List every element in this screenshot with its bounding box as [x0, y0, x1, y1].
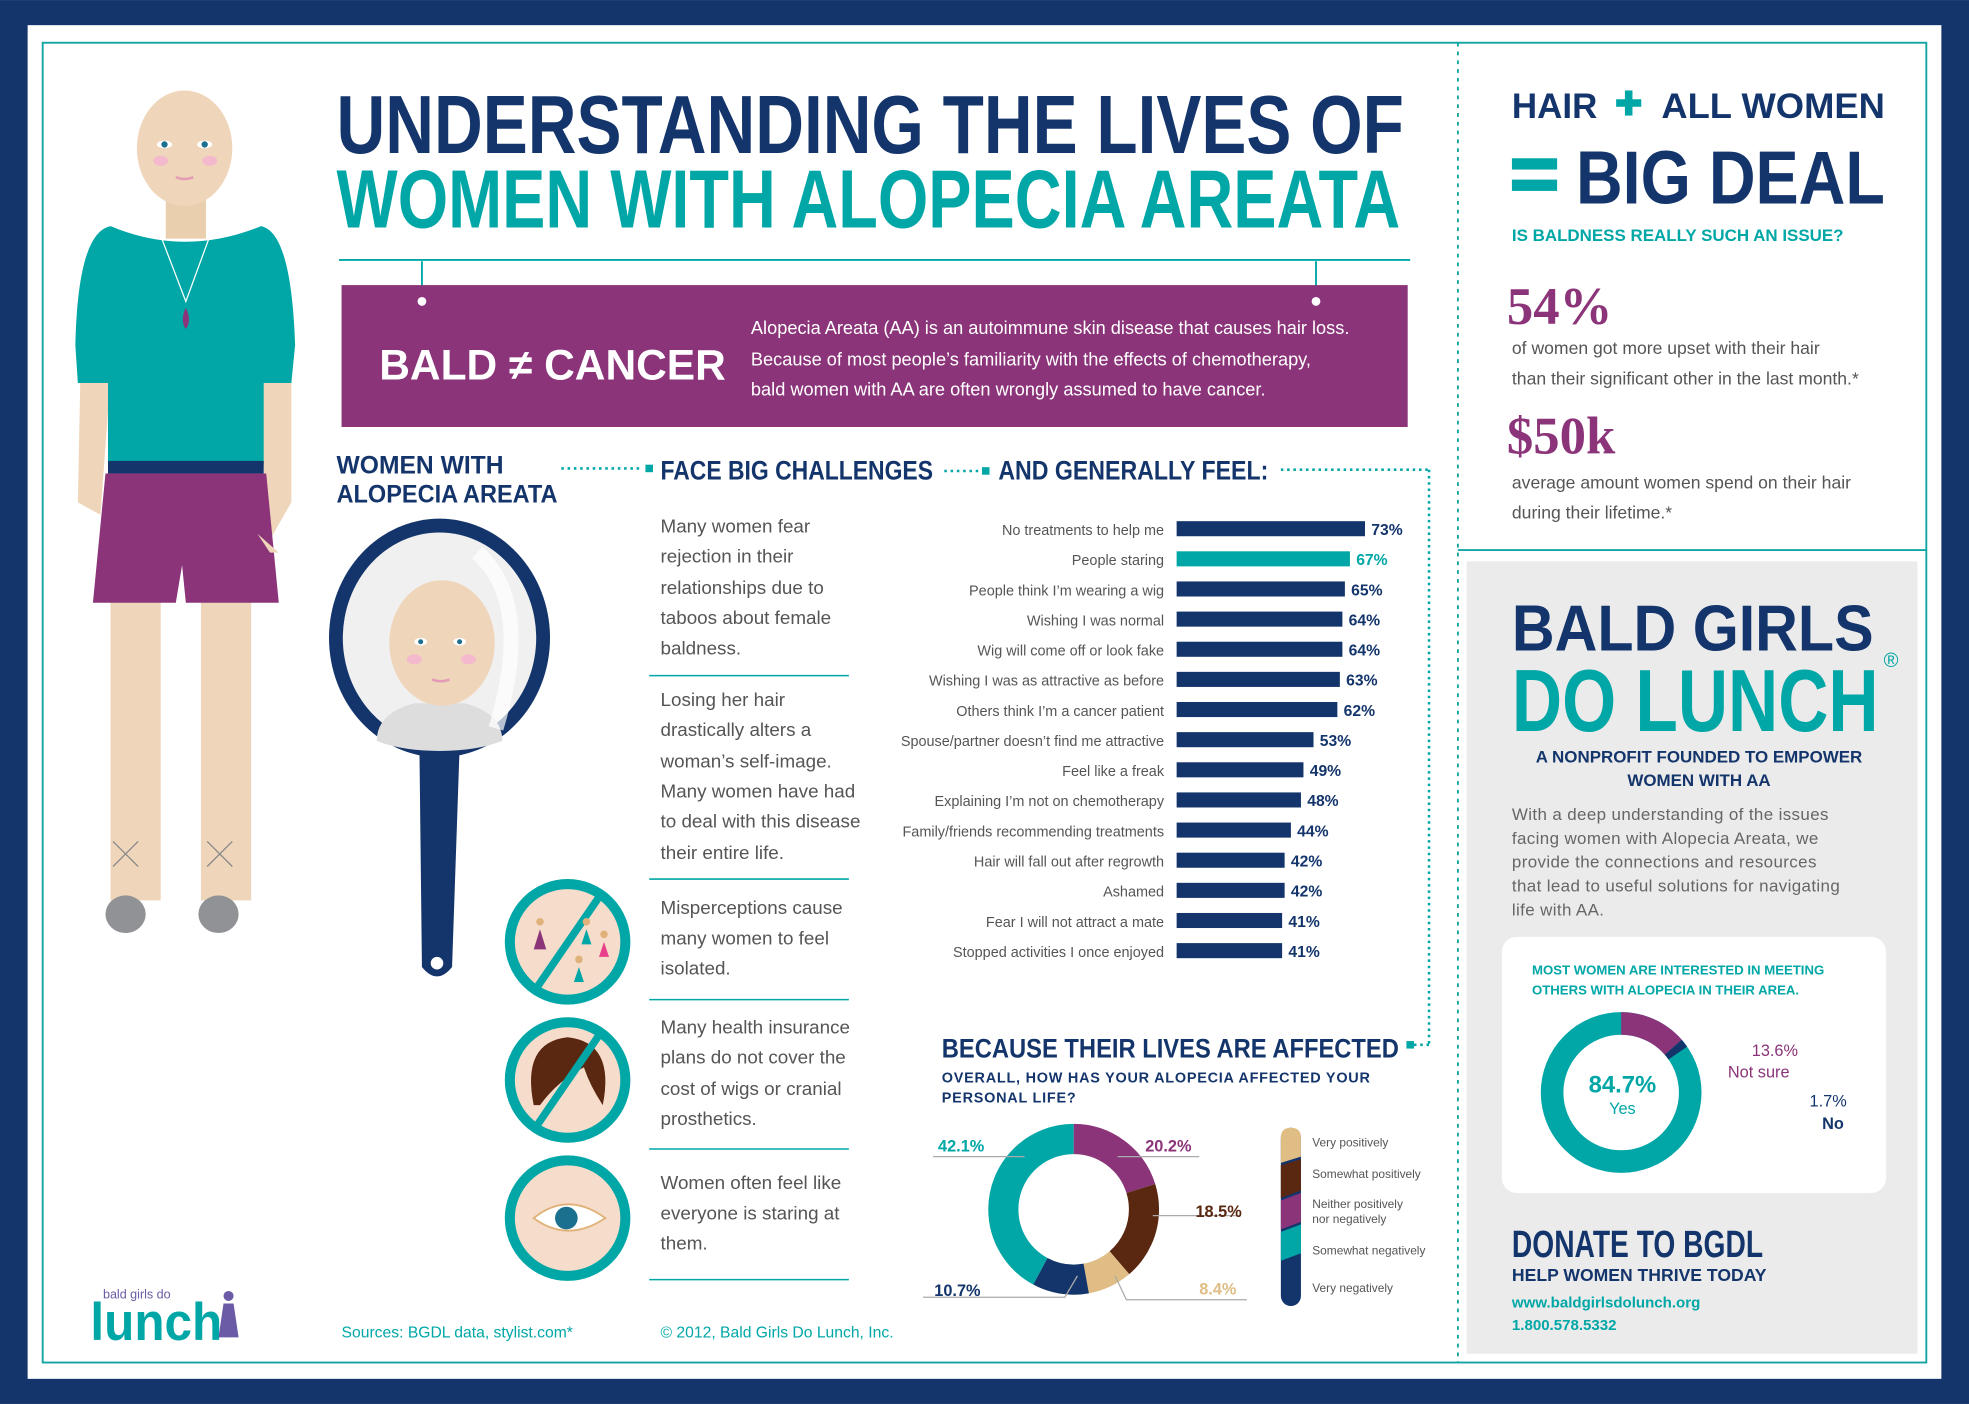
illustration: woman [75, 90, 295, 933]
title: WOMEN WITH ALOPECIA AREATA [337, 152, 1400, 245]
bar chart: feelings [901, 521, 1403, 961]
bar chart: feelings: 44% [1297, 823, 1329, 840]
donut chart: personal life: 8.4% [1199, 1281, 1237, 1299]
heading: because their lives are affected [942, 1033, 1399, 1107]
donut chart: personal life: 20.2% [1145, 1138, 1192, 1156]
legend: Very positively [1312, 1136, 1388, 1150]
bar chart: feelings: 63% [1346, 673, 1378, 690]
panel: hair + all women = big deal: average amount women spend on their hair [1512, 473, 1851, 493]
banner: bald not cancer: BALD ≠ CANCER [379, 341, 726, 389]
banner: bald not cancer: Alopecia Areata (AA) is an autoimmune skin disease that causes hair loss. [751, 318, 1349, 338]
bar chart: feelings: 73% [1371, 522, 1403, 539]
footer: logo and sources: bald girls do [103, 1287, 171, 1301]
challenges text: Misperceptions cause [661, 897, 843, 918]
bar chart: feelings: 49% [1310, 763, 1341, 780]
challenges text: baldness. [661, 637, 741, 658]
heading: because their lives are affected: OVERALL, HOW HAS YOUR ALOPECIA AFFECTED YOUR [942, 1070, 1371, 1086]
footer: logo and sources: lunch [90, 1293, 222, 1352]
challenges text: many women to feel [661, 927, 829, 948]
challenges text: plans do not cover the [661, 1047, 846, 1068]
bar chart: feelings: Family/friends recommending treatments [902, 824, 1164, 840]
challenges text: them. [661, 1233, 708, 1254]
banner: bald not cancer: Because of most people’s familiarity with the effects of chemotherapy, [751, 349, 1311, 369]
panel: hair + all women = big deal: 54% [1507, 278, 1612, 336]
heading: because their lives are affected: PERSONAL LIFE? [942, 1091, 1076, 1107]
icon: wig [510, 1022, 625, 1138]
bar chart: feelings: Feel like a freak [1062, 764, 1165, 780]
challenges text: everyone is staring at [661, 1202, 840, 1223]
bar chart: feelings: 62% [1344, 703, 1375, 720]
panel: bald girls do lunch: With a deep understanding of the issues [1512, 805, 1829, 824]
bar chart: feelings: Ashamed [1103, 885, 1164, 901]
panel: bald girls do lunch: that lead to useful solutions for navigating [1512, 877, 1840, 896]
challenges text: Many health insurance [661, 1017, 850, 1038]
bar chart: feelings: No treatments to help me [1002, 523, 1164, 539]
bar chart: feelings: 65% [1351, 582, 1383, 599]
banner: bald not cancer: bald women with AA are often wrongly assumed to have cancer. [751, 380, 1266, 400]
donate block: 1.800.578.5332 [1512, 1317, 1617, 1334]
donate block: DONATE TO BGDL [1512, 1223, 1763, 1265]
donut chart: meeting others [1502, 937, 1886, 1193]
legend: nor negatively [1312, 1212, 1386, 1226]
panel: hair + all women = big deal: $50k [1507, 407, 1616, 465]
section headings: AND GENERALLY FEEL: [998, 456, 1268, 486]
donut chart: meeting others: 84.7% [1589, 1072, 1656, 1099]
section headings: FACE BIG CHALLENGES [661, 456, 933, 486]
panel: bald girls do lunch: DO LUNCH [1512, 651, 1879, 750]
bar chart: feelings: 41% [1288, 914, 1320, 931]
challenges text: Losing her hair [661, 689, 785, 710]
footer: logo and sources: © 2012, Bald Girls Do Lunch, Inc. [661, 1324, 894, 1341]
bar chart: feelings: People staring [1072, 553, 1164, 569]
section headings: ALOPECIA AREATA [337, 480, 558, 508]
bar chart: feelings: 42% [1291, 884, 1322, 901]
panel: hair + all women = big deal: ALL WOMEN [1661, 87, 1885, 126]
bar chart: feelings: Fear I will not attract a mate [986, 915, 1164, 931]
legend: Somewhat positively [1312, 1167, 1421, 1181]
bar chart: feelings: Wishing I was normal [1027, 613, 1164, 629]
challenges text: rejection in their [661, 546, 793, 567]
title [337, 78, 1404, 245]
legend [1281, 1128, 1425, 1306]
donut chart: meeting others: OTHERS WITH ALOPECIA IN THEIR AREA. [1532, 983, 1799, 998]
legend: Very negatively [1312, 1281, 1393, 1295]
challenges text: relationships due to [661, 577, 824, 598]
panel: hair + all women = big deal: during their lifetime.* [1512, 503, 1672, 523]
bar chart: feelings: 48% [1307, 793, 1339, 810]
challenges text: Women often feel like [661, 1172, 841, 1193]
donate block: HELP WOMEN THRIVE TODAY [1512, 1265, 1767, 1285]
panel: bald girls do lunch: BALD GIRLS [1512, 592, 1874, 665]
donate block [1511, 1223, 1767, 1334]
panel: hair + all women = big deal: BIG DEAL [1576, 135, 1885, 219]
bar chart: feelings: 53% [1320, 733, 1351, 750]
panel: bald girls do lunch: WOMEN WITH AA [1627, 771, 1771, 790]
donut chart: personal life [923, 1138, 1247, 1300]
donut chart: meeting others: MOST WOMEN ARE INTERESTED IN MEETING [1532, 962, 1824, 977]
challenges text: isolated. [661, 957, 731, 978]
bar chart: feelings: 64% [1349, 643, 1380, 660]
bar chart: feelings: Explaining I’m not on chemotherapy [935, 794, 1165, 810]
donut chart: meeting others: 1.7% [1810, 1092, 1847, 1110]
panel: bald girls do lunch: A NONPROFIT FOUNDED TO EMPOWER [1536, 747, 1862, 766]
challenges text: Many women fear [661, 515, 810, 536]
bar chart: feelings: 42% [1291, 854, 1322, 871]
bar chart: feelings: Wig will come off or look fake [977, 644, 1164, 660]
donut chart: meeting others: Not sure [1728, 1063, 1790, 1081]
panel: hair + all women = big deal [1507, 87, 1885, 523]
challenges text: prosthetics. [661, 1108, 757, 1129]
heading: because their lives are affected: BECAUSE THEIR LIVES ARE AFFECTED [942, 1033, 1399, 1063]
panel: hair + all women = big deal: IS BALDNESS REALLY SUCH AN ISSUE? [1512, 226, 1844, 245]
panel: hair + all women = big deal: HAIR [1512, 87, 1597, 126]
challenges text: woman’s self-image. [660, 750, 832, 771]
challenges text: taboos about female [661, 607, 831, 628]
bar chart: feelings: Hair will fall out after regrowth [974, 855, 1164, 871]
panel: bald girls do lunch: provide the connections and resources [1512, 853, 1817, 872]
challenges text [649, 515, 860, 1280]
footer: logo and sources: Sources: BGDL data, stylist.com* [342, 1324, 573, 1341]
challenges text: drastically alters a [661, 719, 812, 740]
banner: bald not cancer [342, 285, 1408, 427]
footer: logo and sources [90, 1287, 894, 1352]
panel: bald girls do lunch: ® [1884, 650, 1899, 672]
donut chart: meeting others: Yes [1609, 1100, 1636, 1118]
title: UNDERSTANDING THE LIVES OF [337, 78, 1404, 171]
bar chart: feelings: Spouse/partner doesn’t find me attractive [901, 734, 1164, 750]
challenges text: cost of wigs or cranial [661, 1078, 842, 1099]
bar chart: feelings: Others think I’m a cancer patient [956, 704, 1164, 720]
bar chart: feelings: People think I’m wearing a wig [969, 583, 1164, 599]
panel: hair + all women = big deal: of women got more upset with their hair [1512, 338, 1820, 358]
panel: bald girls do lunch: life with AA. [1512, 900, 1604, 919]
challenges text: to deal with this disease [661, 811, 860, 832]
legend: Neither positively [1312, 1197, 1403, 1211]
bar chart: feelings: 64% [1349, 612, 1380, 629]
bar chart: feelings: Wishing I was as attractive as before [929, 674, 1164, 690]
challenges text: their entire life. [661, 842, 784, 863]
donut chart: personal life: 10.7% [934, 1282, 981, 1300]
section headings [337, 451, 1429, 1049]
bar chart: feelings: 67% [1356, 552, 1388, 569]
icon: isolated people [510, 884, 625, 1000]
panel: bald girls do lunch: facing women with Alopecia Areata, we [1512, 829, 1819, 848]
bar chart: feelings: Stopped activities I once enjoyed [953, 945, 1164, 961]
icon: eye [510, 1160, 625, 1276]
section headings: WOMEN WITH [337, 451, 504, 479]
panel: hair + all women = big deal: than their significant other in the last month.* [1512, 368, 1859, 388]
donut chart: meeting others: 13.6% [1752, 1042, 1798, 1060]
panel: bald girls do lunch [1467, 561, 1918, 1354]
donut chart: personal life: 42.1% [938, 1138, 985, 1156]
bar chart: feelings: 41% [1288, 944, 1320, 961]
legend: Somewhat negatively [1312, 1244, 1425, 1258]
donut chart: meeting others: No [1822, 1115, 1844, 1133]
donate block: www.baldgirlsdolunch.org [1511, 1294, 1700, 1311]
donut chart: personal life: 18.5% [1195, 1203, 1242, 1221]
mirror [329, 519, 550, 976]
challenges text: Many women have had [661, 780, 855, 801]
